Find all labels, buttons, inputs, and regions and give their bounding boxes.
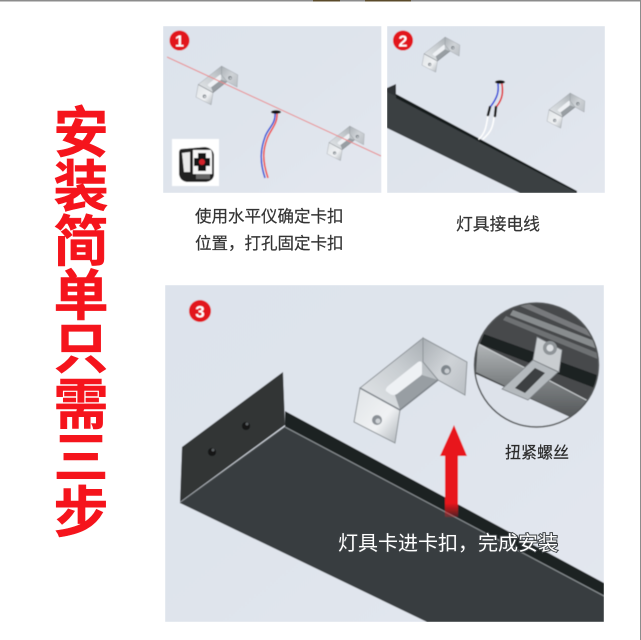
arrow <box>440 425 467 517</box>
title: 步 <box>53 482 109 544</box>
caption: step 2: 灯具接电线 <box>456 215 540 234</box>
title: 单 <box>53 265 109 327</box>
badge: 3 <box>189 300 211 322</box>
inset bracket <box>502 337 562 400</box>
icon: right bracket <box>327 126 364 161</box>
icon: large bracket <box>354 338 467 443</box>
icon: upper bracket <box>422 37 460 72</box>
icon: right bracket <box>547 93 585 128</box>
panel: step 2 <box>387 26 605 193</box>
label: tighten screw: 扭紧螺丝 <box>505 444 569 462</box>
badge: 1: 1 <box>175 34 184 50</box>
title <box>53 102 109 544</box>
badge: 3: 3 <box>195 302 205 322</box>
panel: step 1 <box>163 26 382 193</box>
laser level line <box>167 57 381 156</box>
badge: 2: 2 <box>399 34 408 50</box>
panel: step 3 <box>165 285 605 622</box>
icon: ceiling wires <box>261 110 281 178</box>
icon: laser level device <box>172 139 219 186</box>
icon: left bracket <box>196 66 238 105</box>
inset: screw detail <box>474 303 598 418</box>
caption: step 1 <box>195 207 344 253</box>
title: 简 <box>53 211 109 273</box>
title: 三 <box>53 427 109 489</box>
lamp body <box>387 84 577 193</box>
callout: snap the lamp in: 灯具卡进卡扣，完成安装 <box>338 532 558 555</box>
title: 需 <box>53 374 109 436</box>
caption: step 1: 位置，打孔固定卡扣 <box>195 234 344 253</box>
badge: 2 <box>393 30 413 50</box>
title: 只 <box>53 318 109 380</box>
title: 安 <box>53 102 109 164</box>
title: 装 <box>53 156 109 218</box>
badge: 1 <box>170 30 190 50</box>
lamp body <box>180 372 604 622</box>
icon: connected wires <box>479 80 505 139</box>
caption: step 1: 使用水平仪确定卡扣 <box>195 207 344 226</box>
